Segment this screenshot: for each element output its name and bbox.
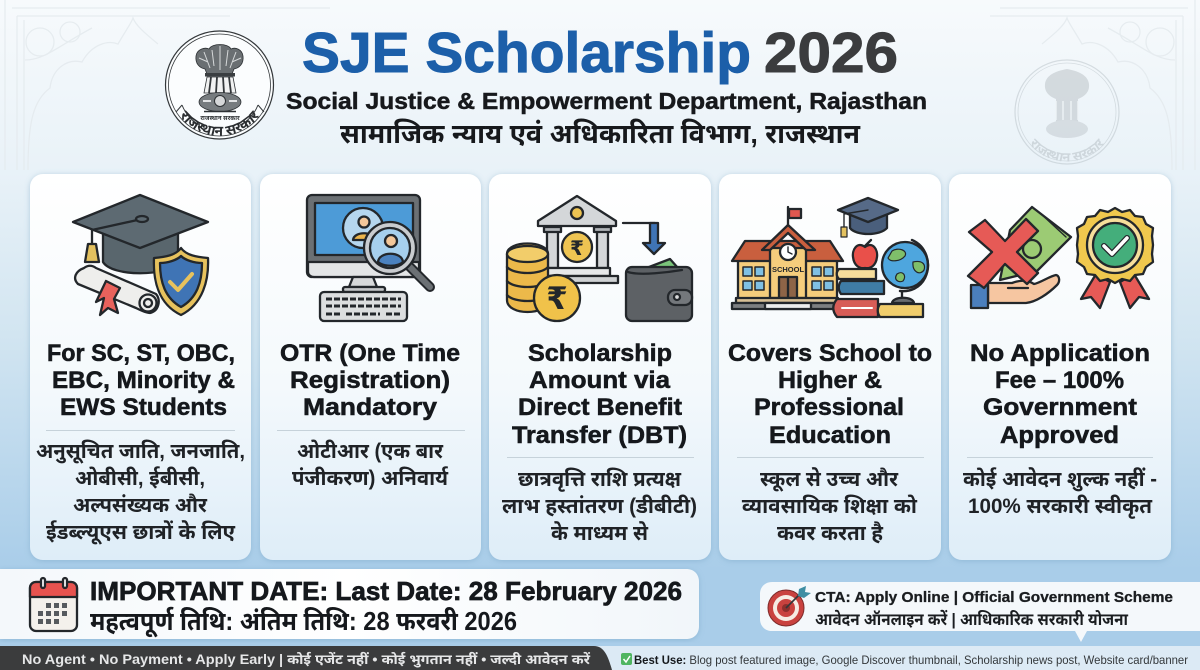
Hindi description: ओबीसी, ईबीसी, bbox=[75, 466, 205, 490]
icon: check box bbox=[621, 653, 632, 665]
Hindi description: अनुसूचित जाति, जनजाति, bbox=[36, 439, 245, 464]
watermark emblem: right: राजस्थान सरकार bbox=[1032, 138, 1104, 162]
icon: school, cap, apple, globe and books: SCHOOL bbox=[772, 265, 804, 274]
Hindi description: के माध्यम से bbox=[551, 521, 648, 545]
Hindi description: अल्पसंख्यक और bbox=[73, 493, 208, 517]
notice text: No Agent • No Payment • Apply Early | कोई एजेंट नहीं • कोई भुगतान नहीं • जल्दी आवेदन करें bbox=[22, 650, 591, 669]
subtitle: English: Social Justice & Empowerment Department, Rajasthan bbox=[286, 88, 927, 114]
panel: eligible students bbox=[30, 174, 251, 560]
icon: graduation cap, shield and diploma bbox=[73, 195, 208, 315]
title: SJE Scholarship bbox=[302, 21, 751, 85]
Hindi description: ओटीआर (एक बार bbox=[297, 439, 444, 463]
panel: no application fee bbox=[949, 174, 1171, 560]
Hindi description bbox=[741, 467, 918, 545]
heading: EBC, Minority & bbox=[52, 367, 235, 394]
heading: No Application bbox=[970, 340, 1150, 367]
heading: Higher & bbox=[778, 367, 882, 394]
heading: Transfer (DBT) bbox=[512, 422, 687, 449]
heading: Scholarship bbox=[528, 340, 672, 367]
Hindi description: 100% सरकारी स्वीकृत bbox=[968, 494, 1153, 519]
heading: OTR (One Time bbox=[280, 340, 460, 367]
ornamental frame: left bbox=[5, 0, 330, 170]
icon: computer with magnifier bbox=[307, 195, 430, 321]
panel: call to action bbox=[760, 582, 1200, 642]
panel: education levels bbox=[719, 174, 941, 560]
divider bbox=[277, 430, 465, 431]
divider bbox=[967, 457, 1153, 458]
date: English: IMPORTANT DATE: Last Date: 28 February 2026 bbox=[90, 576, 682, 606]
icon: hand with crossed-out money bbox=[968, 207, 1071, 308]
panel: important date bbox=[0, 569, 699, 639]
icon: school, cap, apple, globe and books bbox=[732, 198, 928, 317]
Hindi description: स्कूल से उच्च और bbox=[760, 467, 899, 492]
heading: Professional bbox=[754, 394, 904, 421]
heading bbox=[970, 340, 1150, 449]
icon: calendar bbox=[30, 578, 77, 631]
icon: bank, rupee coins, arrow and wallet: ₹ bbox=[546, 281, 568, 316]
heading: Education bbox=[769, 422, 891, 449]
Hindi description: छात्रवृत्ति राशि प्रत्यक्ष bbox=[518, 467, 682, 492]
bottom strip: best use bbox=[590, 646, 1200, 670]
heading bbox=[47, 340, 235, 421]
heading: Approved bbox=[1000, 422, 1119, 449]
icon: bank, rupee coins, arrow and wallet bbox=[507, 196, 692, 321]
Hindi description bbox=[36, 439, 245, 545]
subtitle: Hindi: सामाजिक न्याय एवं अधिकारिता विभाग, राजस्थान bbox=[340, 119, 861, 149]
Hindi description: पंजीकरण) अनिवार्य bbox=[292, 466, 449, 490]
divider bbox=[737, 457, 924, 458]
emblem: Rajasthan government seal bbox=[164, 30, 274, 140]
heading bbox=[280, 340, 460, 421]
Hindi description: कवर करता है bbox=[777, 521, 884, 545]
heading: For SC, ST, OBC, bbox=[47, 340, 235, 367]
heading: Covers School to bbox=[728, 340, 932, 367]
CTA: English: CTA: Apply Online | Official Government Scheme bbox=[815, 589, 1173, 606]
heading: Direct Benefit bbox=[518, 394, 682, 421]
heading: Mandatory bbox=[303, 394, 438, 421]
heading bbox=[512, 340, 687, 449]
Hindi description bbox=[292, 439, 449, 490]
heading: Amount via bbox=[529, 367, 671, 394]
Hindi description bbox=[963, 467, 1157, 519]
Hindi description bbox=[502, 467, 697, 545]
panel: one time registration bbox=[260, 174, 481, 560]
Hindi description: व्यावसायिक शिक्षा को bbox=[741, 494, 918, 518]
Hindi description: ईडब्ल्यूएस छात्रों के लिए bbox=[46, 520, 236, 545]
date: Hindi: महत्वपूर्ण तिथि: अंतिम तिथि: 28 फरवरी 2026 bbox=[90, 606, 517, 638]
heading: Registration) bbox=[290, 367, 450, 394]
divider bbox=[46, 430, 235, 431]
heading bbox=[728, 340, 932, 449]
emblem: Rajasthan government seal: राजस्थान सरकार bbox=[182, 110, 258, 136]
Hindi description: लाभ हस्तांतरण (डीबीटी) bbox=[502, 494, 697, 518]
heading: EWS Students bbox=[60, 394, 227, 421]
heading: Government bbox=[983, 394, 1137, 421]
heading: Fee – 100% bbox=[995, 367, 1124, 394]
icon: target with arrow bbox=[768, 586, 811, 626]
Hindi description: कोई आवेदन शुल्क नहीं - bbox=[963, 467, 1157, 492]
icon: approved rosette bbox=[1077, 208, 1153, 308]
panel: direct benefit transfer bbox=[489, 174, 711, 560]
emblem: Rajasthan government seal: राजस्थान सरकार bbox=[200, 116, 240, 122]
icon: bank, rupee coins, arrow and wallet: ₹ bbox=[570, 238, 584, 260]
bottom strip: no agent notice bbox=[0, 646, 612, 670]
title: 2026 bbox=[764, 21, 898, 85]
CTA: Hindi: आवेदन ऑनलाइन करें | आधिकारिक सरकारी योजना bbox=[815, 609, 1129, 629]
watermark emblem: right bbox=[1014, 60, 1120, 164]
divider bbox=[507, 457, 694, 458]
ornamental frame: right bbox=[990, 0, 1195, 170]
